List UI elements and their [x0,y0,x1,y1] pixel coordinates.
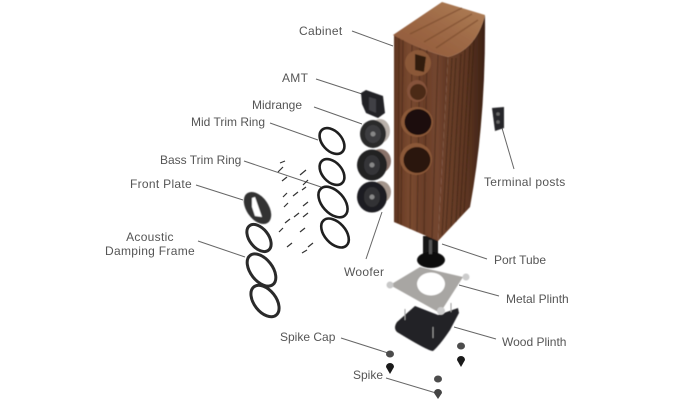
leader: Port Tube [442,244,487,259]
label: Woofer: Woofer [344,265,384,279]
front plate [238,187,277,229]
wood plinth [395,303,459,351]
label: Spike: Spike [353,368,383,382]
label: Bass Trim Ring: Bass Trim Ring [160,153,241,167]
label: Metal Plinth: Metal Plinth [506,292,569,306]
terminal posts [492,107,504,131]
leader: Mid Trim Ring [270,123,318,140]
driver openings [400,50,433,175]
label: AMT: AMT [282,71,309,85]
icon: AMT tweeter [361,90,385,118]
leader: Midrange [314,107,362,124]
leader: Acoustic Damping Frame [198,241,245,257]
label: Front Plate: Front Plate [130,177,192,191]
spikes [386,356,465,399]
leader: Bass Trim Ring [244,161,321,187]
acoustic damping frames [241,220,285,322]
trim rings [313,123,354,253]
leader: Terminal posts [502,128,514,169]
label: Port Tube: Port Tube [494,253,546,267]
port tube [417,236,445,268]
leader: Woofer [366,212,382,259]
label: Mid Trim Ring: Mid Trim Ring [191,115,265,129]
label: Acoustic Damping Frame: Damping Frame [105,244,195,258]
leader: Metal Plinth [459,285,499,296]
metal plinth [386,267,470,315]
leader: Spike Cap [341,338,388,353]
leader: Wood Plinth [454,327,496,339]
leader: Front Plate [196,185,243,200]
label: Cabinet: Cabinet [299,24,343,38]
label: Wood Plinth: Wood Plinth [502,335,566,349]
label: Spike Cap: Spike Cap [280,330,336,344]
cabinet [393,2,485,268]
leader: AMT [316,79,362,94]
icon: woofer driver [357,181,391,212]
screws [278,161,313,253]
leader: Cabinet [352,31,393,46]
spike caps [386,342,465,382]
icon: midrange driver [360,119,390,148]
icon: bass driver [357,149,391,180]
label: Acoustic Damping Frame: Acoustic [126,230,174,244]
leader: Spike [386,378,436,393]
label: Terminal posts: Terminal posts [484,175,566,189]
label: Midrange: Midrange [252,98,302,112]
